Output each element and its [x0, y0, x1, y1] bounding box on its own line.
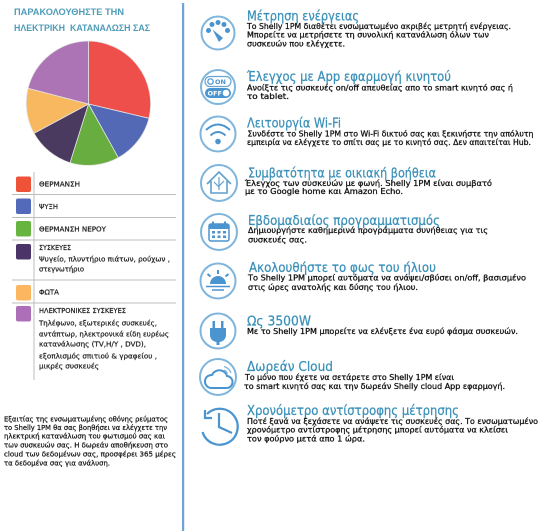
feature: wi-fi [200, 116, 534, 152]
feature description: Μπορείτε να μετρήσετε τη συνολική κατανάλωση όλων των [247, 30, 489, 40]
feature description [248, 226, 488, 244]
feature title: Λειτουργία Wi-Fi [247, 116, 341, 131]
icon: on/off toggles: OFF [208, 90, 222, 98]
feature title: Ως 3500W [247, 315, 311, 330]
feature description: Δημιουργήστε καθημερινά προγράμματα συνήθειας για τις [248, 226, 488, 235]
text block: display description: Εξαιτίας της ενσωματωμένης οθόνης ρεύματος [4, 416, 168, 424]
feature description [244, 373, 505, 391]
feature description: Το Shelly 1PM διαθέτει ενσωματωμένο ακριβές μετρητή ενέργειας. [246, 22, 511, 31]
feature description: τον φούρνο μετά απο 1 ώρα. [247, 434, 365, 444]
feature: voice assistant [201, 165, 492, 201]
text block: display description [4, 416, 176, 468]
icon: sunrise [200, 264, 236, 298]
feature: app control [201, 70, 513, 104]
column divider [182, 3, 184, 531]
icon: wi-fi [200, 116, 236, 152]
feature: energy metering [202, 10, 511, 50]
legend labels: μικρές συσκευές [39, 362, 99, 370]
feature description [247, 274, 526, 292]
legend labels: Τηλέφωνο, εξωτερικές συσκευές, [38, 320, 157, 328]
feature description: Έλεγχος των συσκευών με φωνή. Shelly 1PM είναι συμβατό [244, 179, 492, 188]
feature description: εμπειρία να ελέγχετε το σπίτι σας με το κινητό σας. Δεν απαιτείται Hub. [247, 138, 531, 147]
feature description: Το μόνο που έχετε να σετάρετε στο Shelly 1PM είναι [244, 373, 454, 382]
feature: free cloud [200, 359, 505, 395]
legend labels: Ψυγείο, πλυντήριο πιάτων, ρούχων , [39, 256, 170, 264]
feature description: το smart κινητό σας και την δωρεάν Shelly cloud App εφαρμογή. [244, 382, 505, 391]
legend swatch: water heating [16, 221, 31, 236]
feature title: Χρονόμετρο αντίστροφης μέτρησης [247, 404, 459, 419]
legend labels: ΨΥΞΗ [39, 203, 58, 211]
feature description: Συνδέστε το Shelly 1PM στο Wi-Fi δικτυό σας και ξεκινήστε την απόλυτη [248, 130, 534, 138]
legend labels: εξοπλισμός σπιτιού & γραφείου , [39, 352, 157, 360]
feature description: Με το Shelly 1PM μπορείτε να ελένξετε ένα ευρύ φάσμα συσκευών. [247, 327, 518, 336]
legend swatch: cooling [16, 198, 31, 214]
feature description [246, 22, 511, 48]
heading: monitor consumption: ΗΛΕΚΤΡΙΚΗ ΚΑΤΑΝΑΛΩΣΗ ΣΑΣ [14, 23, 150, 34]
text block: display description: ηλεκτρική κατανάλωση του φωτισμού σας και [4, 432, 166, 440]
legend labels: ΘΕΡΜΑΝΣΗ [39, 180, 80, 188]
feature title: Συμβατότητα με οικιακή βοήθεια [248, 166, 436, 181]
text block: display description: το Shelly 1PM θα σας βοηθήσει να ελέγχετε την [4, 424, 167, 432]
feature description: το tablet. [247, 92, 289, 101]
feature description: χρονόμετρο αντίστροφης μέτρησης μπορεί αυτόματα να κλείσει [247, 426, 508, 434]
feature description [244, 179, 492, 196]
text block: display description: των συσκευών σας. Η δωρεάν αποθήκευση στο [4, 442, 168, 450]
feature: weekly schedule [201, 214, 488, 250]
legend labels: κατανάλωσης (TV,Η/Υ , DVD), [39, 340, 146, 348]
legend labels [38, 180, 170, 370]
feature title: Ακολουθήστε το φως του ήλιου [249, 261, 436, 276]
pie chart [26, 41, 151, 165]
feature description [247, 130, 534, 147]
feature description: Ανοίξτε τις συσκευές on/off απευθείας απο το smart κινητό σας ή [247, 84, 513, 92]
feature description: Ποτέ ξανά να ξεχάσετε να ανάψετε τις συσκευές σας. Το ενσωματωμένο [247, 417, 538, 426]
icon: gauge [202, 16, 234, 50]
feature description: στις ώρες ανατολής και δύσης του ήλιου. [248, 283, 418, 292]
legend labels: ΦΩΤΑ [39, 288, 60, 296]
feature description [247, 417, 538, 444]
feature description: συσκευών που ελέγχετε. [247, 40, 345, 48]
legend labels: ΣΥΣΚΕΥΕΣ [39, 244, 71, 252]
icon: timer clock [202, 409, 238, 445]
legend [12, 172, 176, 380]
text block: display description: τα δεδομένα σας για ανάλυση. [4, 460, 110, 468]
legend swatch: heating [16, 176, 31, 192]
feature title: Εβδομαδιαίος προγραμματισμός [248, 214, 440, 229]
icon: calendar [201, 214, 237, 250]
feature: follow the sun [200, 261, 526, 298]
legend labels: ΗΛΕΚΤΡΟΝΙΚΕΣ ΣΥΣΚΕΥΕΣ [39, 307, 126, 315]
feature description: με το Google home και Amazon Echo. [245, 187, 403, 196]
legend labels: στεγνωτήριο [39, 266, 84, 274]
heading: monitor consumption [14, 7, 150, 34]
icon: cloud [200, 359, 236, 395]
feature description: συσκευές σας. [248, 236, 307, 244]
text block: display description: cloud των δεδομένων σας, προσφέρει 365 μέρες [4, 450, 176, 458]
icon: on/off toggles: ON [215, 78, 226, 86]
panel: energy monitoring [4, 7, 176, 468]
legend swatch: lights [16, 285, 31, 300]
feature: up to 3500W [200, 314, 518, 348]
legend swatch: electronics [16, 306, 31, 322]
feature description [247, 84, 513, 101]
feature title: Δωρεάν Cloud [247, 360, 333, 375]
icon: plug [200, 314, 236, 348]
icon: smart home [201, 165, 237, 201]
heading: monitor consumption: ΠΑΡΑΚΟΛΟΥΘΗΣΤΕ ΤΗΝ [14, 7, 124, 18]
legend labels: αντάπτωρ, ηλεκτρονικά είδη ευρέως [39, 330, 169, 338]
feature description: Το Shelly 1PM μπορεί αυτόματα να ανάψει/σβύσει on/off, βασισμένο [247, 274, 526, 282]
icon: on/off toggles [201, 70, 235, 104]
feature title: Έλεγχος με App εφαρμογή κινητού [246, 70, 451, 85]
feature title: Μέτρηση ενέργειας [247, 10, 359, 25]
legend labels: ΘΕΡΜΑΝΣΗ ΝΕΡΟΥ [39, 226, 107, 234]
legend swatch: appliances [16, 244, 31, 260]
feature: countdown timer [202, 404, 538, 445]
